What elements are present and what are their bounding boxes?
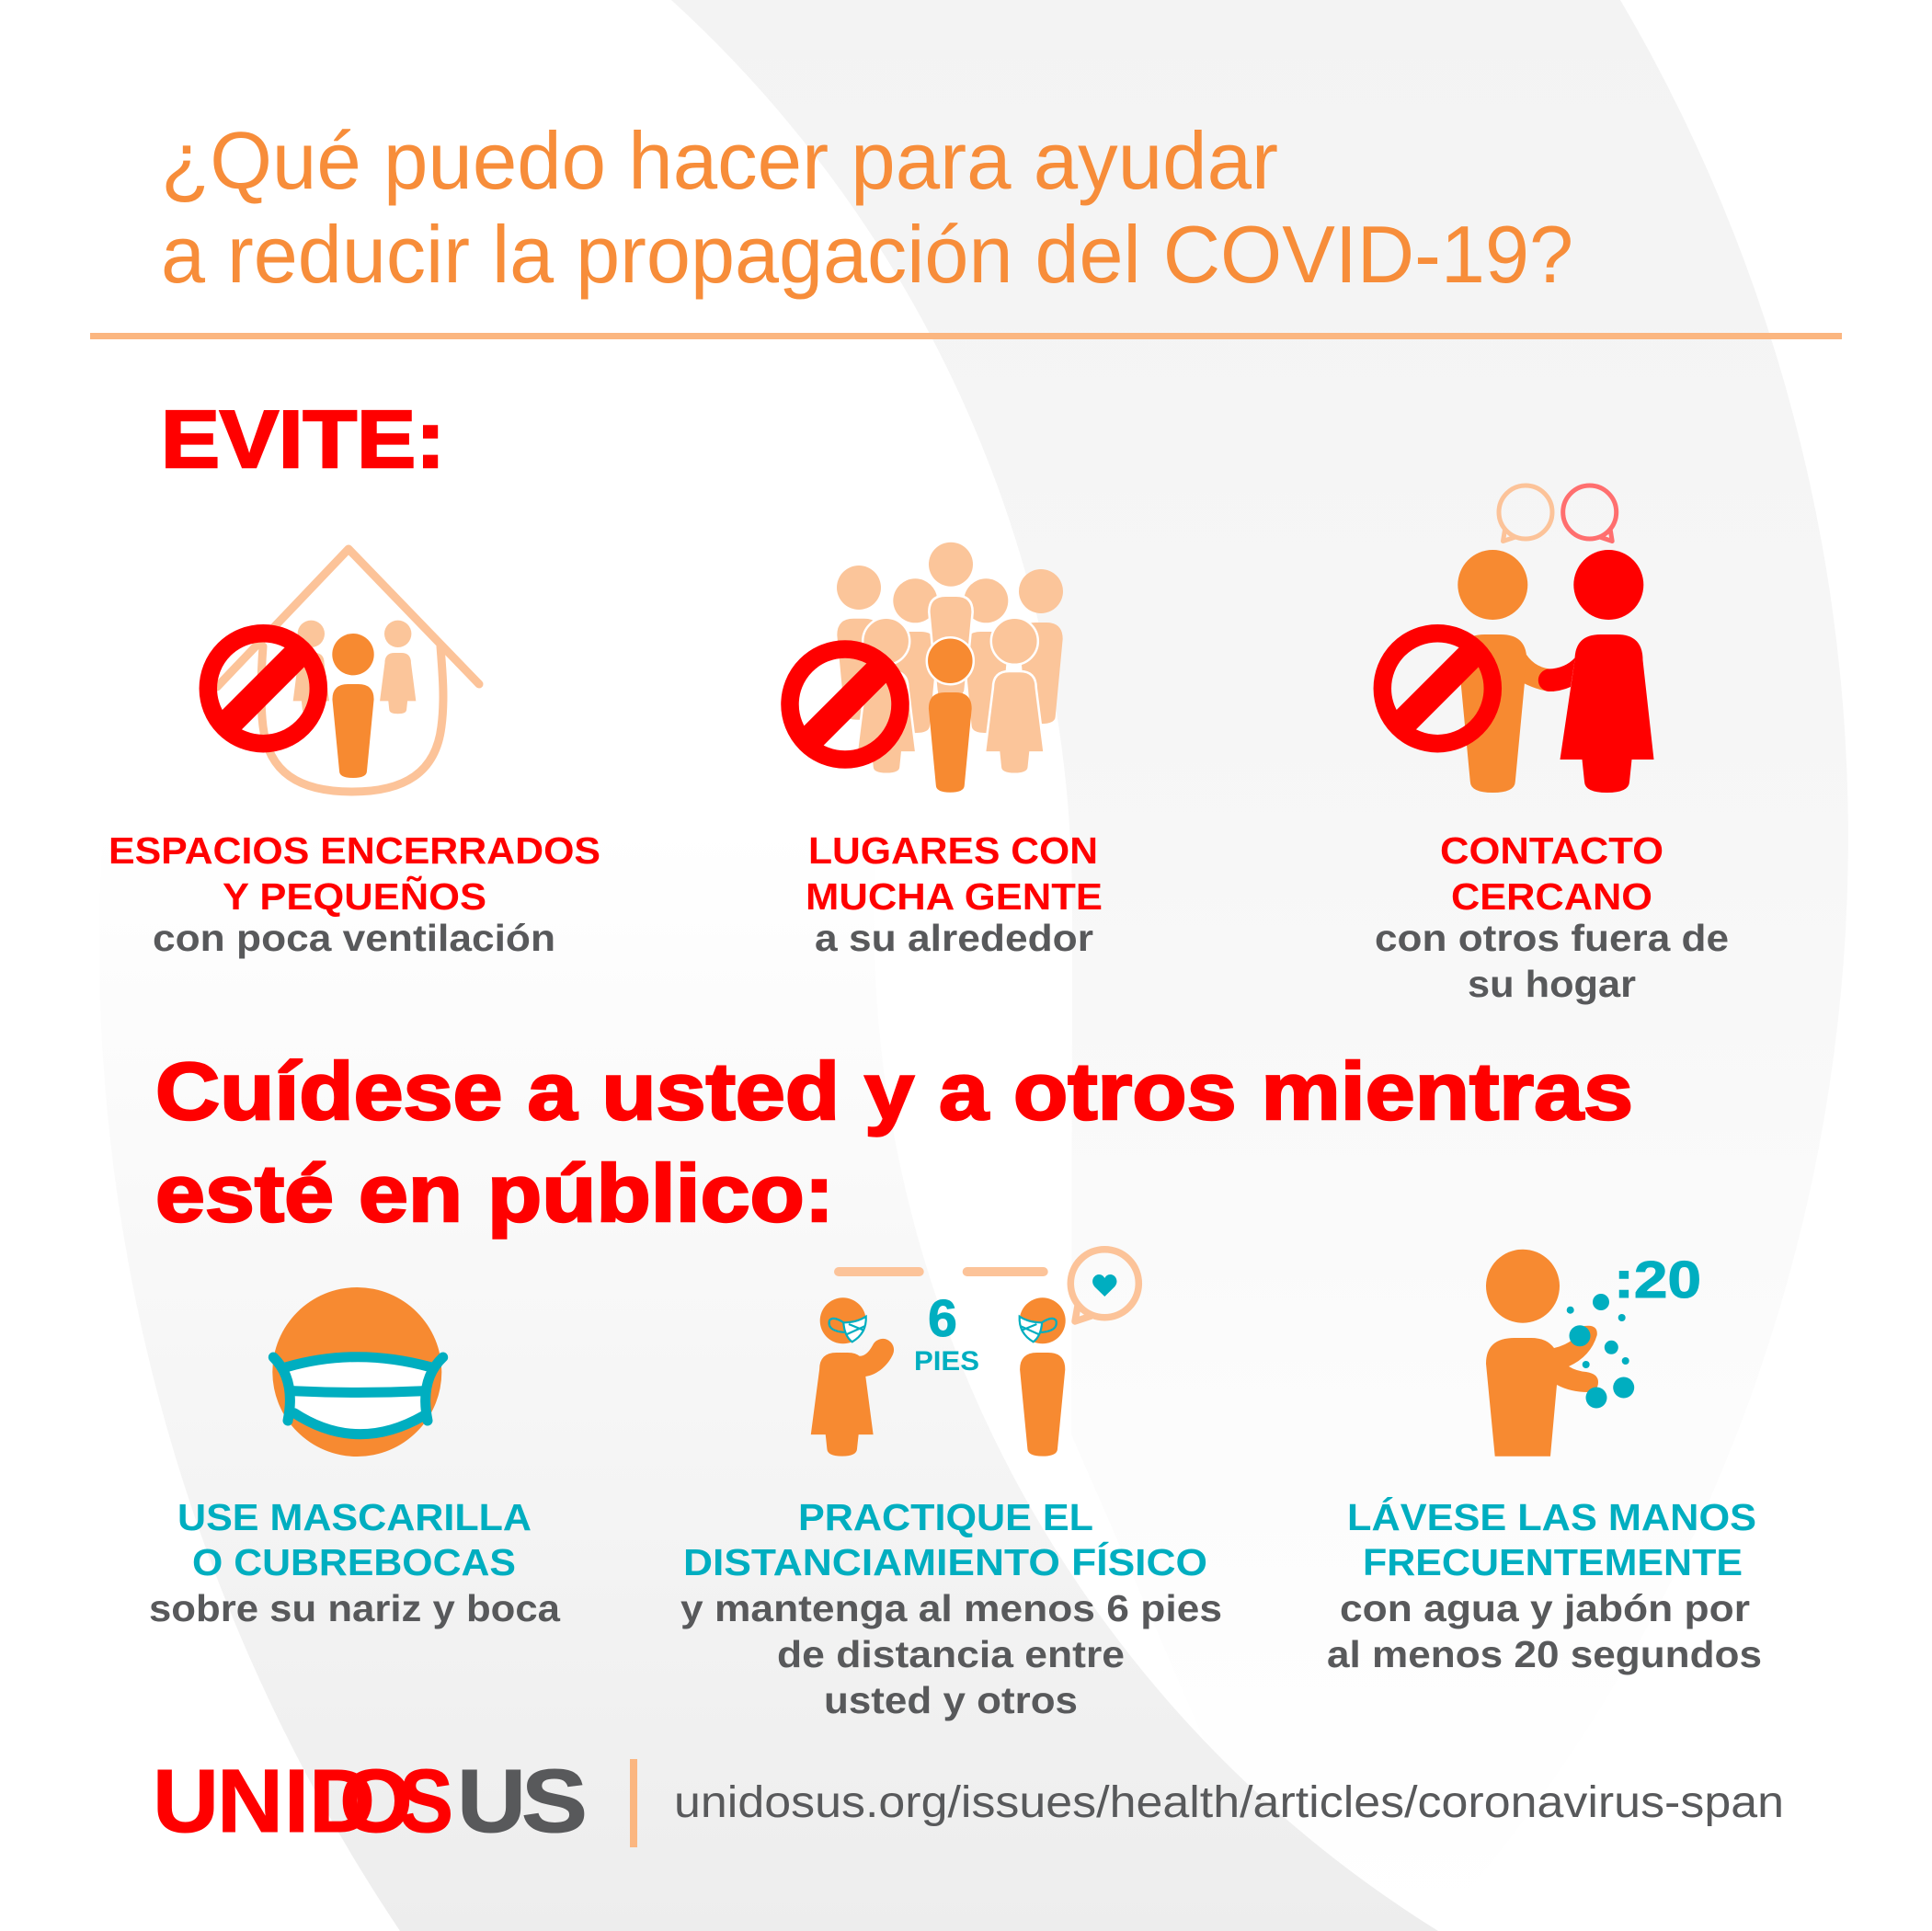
label: lugares con mucha gente bbox=[806, 829, 1103, 959]
label: use mascarilla bbox=[149, 1496, 561, 1629]
label: distanciamiento físico: usted y otros bbox=[824, 1679, 1078, 1721]
logo: UnidosUS: N bbox=[217, 1751, 283, 1851]
footer divider bbox=[630, 1759, 637, 1847]
label: distanciamiento físico: y mantenga al menos 6 pies bbox=[680, 1587, 1222, 1629]
icon: two people six feet apart bbox=[811, 1250, 1138, 1457]
heading: cuídese bbox=[155, 1045, 1633, 1239]
label: espacios encerrados: ESPACIOS ENCERRADOS bbox=[109, 829, 600, 872]
label: lávese las manos: con agua y jabón por bbox=[1340, 1587, 1750, 1629]
panel: espacios encerrados bbox=[109, 549, 600, 959]
icon: head with mask bbox=[272, 1287, 443, 1457]
label: lugares con mucha gente: MUCHA GENTE bbox=[806, 875, 1103, 918]
label: contacto cercano bbox=[1375, 829, 1729, 1005]
panel: lugares con mucha gente bbox=[790, 543, 1103, 959]
logo: UnidosUS: O bbox=[339, 1751, 413, 1851]
logo: UnidosUS: U bbox=[153, 1751, 219, 1851]
heading: cuídese: Cuídese a usted y a otros mientras bbox=[155, 1045, 1633, 1137]
label: contacto cercano: su hogar bbox=[1468, 963, 1636, 1005]
label: distanciamiento físico: DISTANCIAMIENTO FÍSICO bbox=[683, 1541, 1207, 1583]
panel: distanciamiento físico bbox=[680, 1250, 1222, 1721]
title: ¿Qué puedo hacer para ayudar bbox=[161, 115, 1278, 206]
label: espacios encerrados: con poca ventilación bbox=[153, 917, 555, 959]
label: distanciamiento físico: de distancia entre bbox=[777, 1633, 1125, 1675]
logo: UnidosUS: S bbox=[521, 1751, 588, 1851]
icon: two people six feet apart: PIES bbox=[914, 1346, 979, 1377]
label: espacios encerrados bbox=[109, 829, 600, 959]
label: use mascarilla: sobre su nariz y boca bbox=[149, 1587, 561, 1629]
label: use mascarilla: O CUBREBOCAS bbox=[192, 1541, 516, 1583]
label: contacto cercano: CERCANO bbox=[1451, 875, 1652, 918]
title: a reducir la propagación del COVID-19? bbox=[161, 209, 1573, 300]
logo: UnidosUS: U bbox=[457, 1751, 526, 1851]
icon: crowd bbox=[790, 543, 1063, 793]
label: espacios encerrados: Y PEQUEÑOS bbox=[223, 875, 486, 918]
label: lávese las manos: al menos 20 segundos bbox=[1327, 1633, 1762, 1675]
logo: UnidosUS: D bbox=[309, 1751, 375, 1851]
panel: use mascarilla bbox=[149, 1287, 561, 1629]
logo: UnidosUS bbox=[153, 1751, 588, 1851]
heading: cuídese: esté en público: bbox=[155, 1148, 834, 1239]
label: lávese las manos: FRECUENTEMENTE bbox=[1363, 1541, 1743, 1583]
label: lugares con mucha gente: LUGARES CON bbox=[808, 829, 1098, 872]
icon: person washing hands bbox=[1486, 1250, 1701, 1457]
label: contacto cercano: CONTACTO bbox=[1440, 829, 1663, 872]
icon: person washing hands: :20 bbox=[1614, 1251, 1701, 1309]
logo: UnidosUS: S bbox=[399, 1751, 453, 1851]
label: distanciamiento físico: PRACTIQUE EL bbox=[798, 1496, 1093, 1538]
icon: house with people bbox=[208, 549, 479, 792]
heading: EVITE: EVITE: bbox=[161, 394, 445, 485]
logo: UnidosUS: I bbox=[284, 1751, 309, 1851]
label: distanciamiento físico bbox=[680, 1496, 1222, 1721]
panel: contacto cercano bbox=[1375, 486, 1729, 1005]
label: contacto cercano: con otros fuera de bbox=[1375, 917, 1729, 959]
title bbox=[161, 115, 1573, 300]
footer url: unidosus.org/issues/health/articles/coronavirus-span bbox=[674, 1778, 1784, 1827]
label: use mascarilla: USE MASCARILLA bbox=[177, 1496, 532, 1538]
label: lávese las manos bbox=[1327, 1496, 1762, 1675]
icon: two people close contact bbox=[1382, 486, 1653, 793]
icon: two people six feet apart: 6 bbox=[928, 1289, 957, 1348]
label: lávese las manos: LÁVESE LAS MANOS bbox=[1347, 1496, 1756, 1538]
title rule bbox=[90, 333, 1842, 339]
label: lugares con mucha gente: a su alrededor bbox=[815, 917, 1093, 959]
panel: lávese las manos bbox=[1327, 1250, 1762, 1675]
